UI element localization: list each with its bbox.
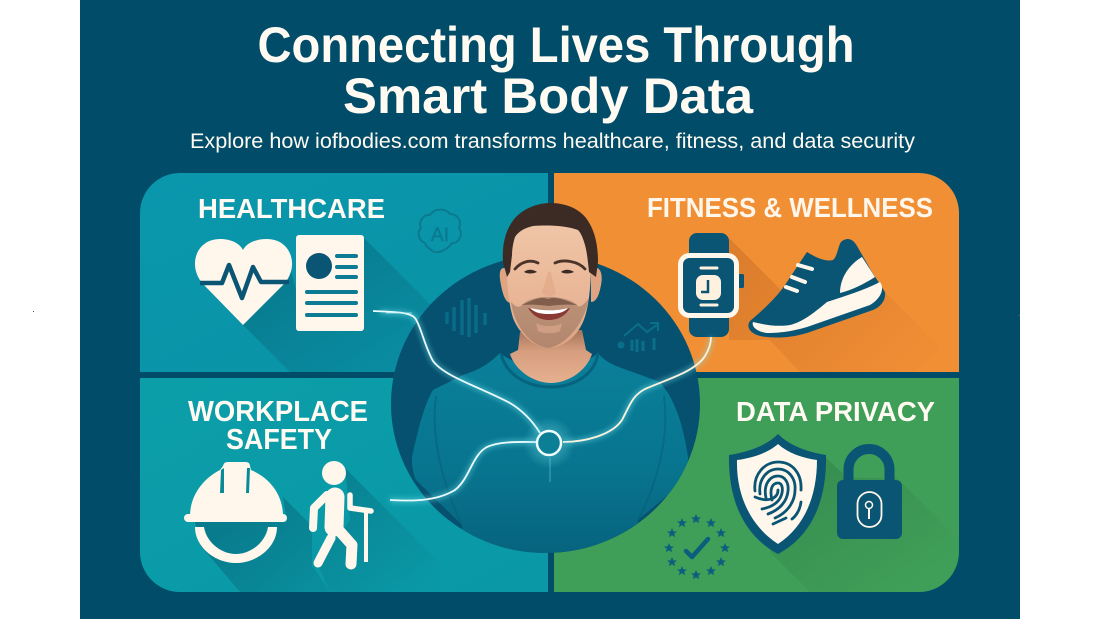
icon: growth chart — [618, 323, 658, 352]
subtitle: Explore how iofbodies.com transforms healthcare, fitness, and data security — [190, 130, 916, 153]
person head — [500, 203, 602, 348]
person shirt — [412, 353, 688, 560]
icon: AI brain cloud: AI — [431, 225, 449, 246]
icon: AI brain cloud — [419, 210, 461, 252]
icon: star ring with check mark — [664, 514, 730, 579]
central node — [523, 417, 575, 469]
icon: person walking with cane — [313, 461, 371, 564]
workplace safety heading: WORKPLACE — [188, 396, 368, 428]
panel: fitness and wellness — [554, 173, 959, 372]
icon: heart with pulse — [195, 239, 292, 325]
icon: waveform — [447, 298, 485, 337]
title: Smart Body Data — [343, 68, 754, 124]
workplace safety heading: SAFETY — [226, 424, 332, 456]
data privacy heading: DATA PRIVACY — [736, 396, 935, 427]
icon: padlock — [837, 449, 902, 539]
healthcare heading: HEALTHCARE — [198, 193, 385, 224]
icon: running shoe — [748, 239, 885, 338]
fitness heading: FITNESS & WELLNESS — [647, 192, 933, 223]
tiny edge specks — [33, 311, 1020, 316]
title: Connecting Lives Through — [258, 17, 854, 73]
icon: medical record document — [296, 235, 364, 331]
center circle with person — [373, 203, 711, 560]
icon: smartwatch — [680, 233, 744, 337]
panel: data privacy — [554, 378, 960, 592]
title — [258, 17, 854, 124]
person neck — [510, 330, 592, 383]
workplace safety heading — [188, 396, 368, 456]
icon: fingerprint shield — [729, 434, 826, 554]
panel: healthcare — [140, 173, 548, 372]
glowing data lines — [373, 311, 711, 501]
panel: workplace safety — [140, 378, 548, 592]
icon: hard hat — [184, 462, 287, 563]
